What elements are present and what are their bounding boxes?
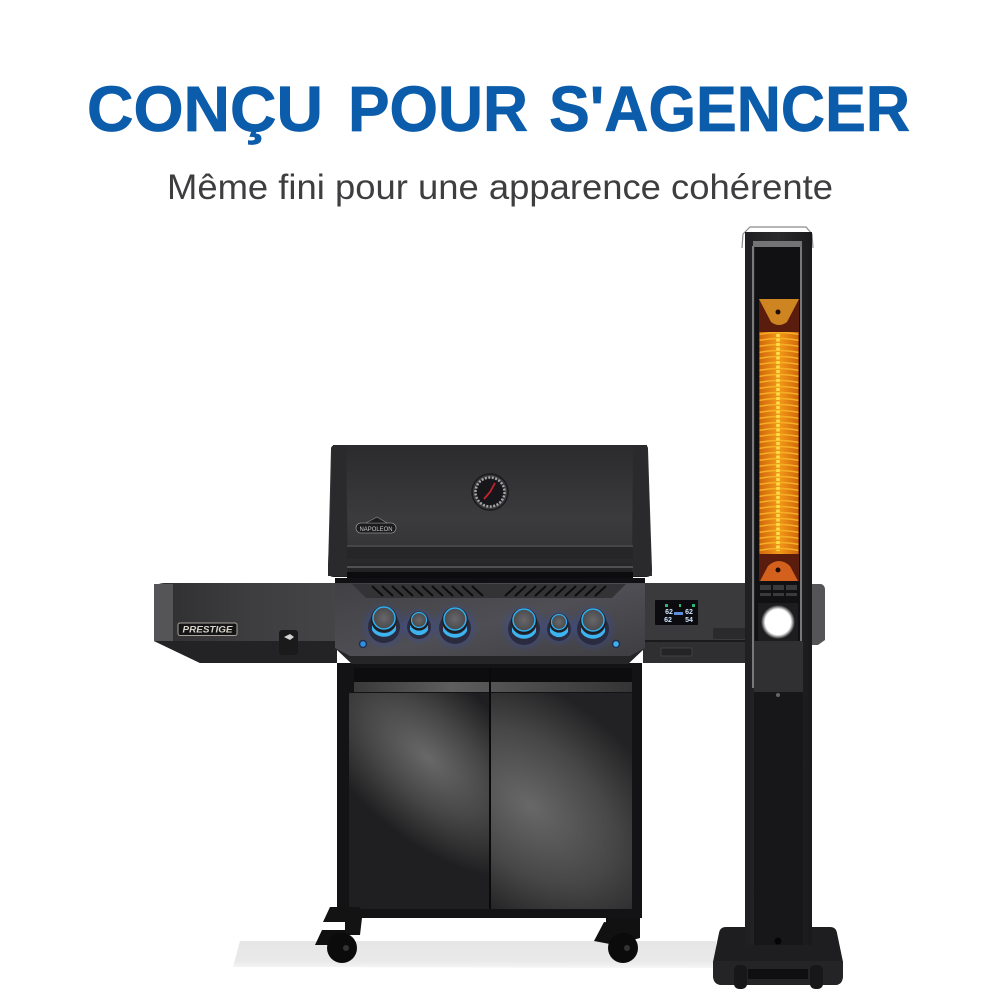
control panel xyxy=(335,583,645,664)
digital display: 54 xyxy=(685,617,693,624)
glowing filament xyxy=(776,334,780,551)
top reflector xyxy=(759,299,799,325)
knob 2 xyxy=(400,607,438,645)
digital display xyxy=(655,600,698,625)
title: CONÇU xyxy=(87,73,323,145)
digital display: 62 xyxy=(685,609,693,616)
vent louvers xyxy=(760,585,797,596)
side controls xyxy=(713,628,746,639)
prestige badge xyxy=(178,623,237,636)
knob 6 xyxy=(569,604,617,652)
knob 1 xyxy=(360,602,408,650)
heating element xyxy=(759,299,799,581)
grill xyxy=(154,445,746,963)
left caster xyxy=(315,907,362,963)
left door xyxy=(349,693,489,909)
napoleon logo xyxy=(356,517,396,533)
knob 4 xyxy=(500,604,548,652)
thermometer xyxy=(472,474,508,510)
right caster xyxy=(594,918,640,963)
title: S'AGENCER xyxy=(549,73,910,145)
floor shadow xyxy=(233,941,716,968)
napoleon logo: NAPOLEON xyxy=(360,526,393,533)
base xyxy=(713,927,843,989)
door handle strip xyxy=(354,682,632,692)
title: POUR xyxy=(348,73,528,145)
knob 3 xyxy=(431,603,479,651)
shelf end behind tower xyxy=(810,584,825,645)
top handle xyxy=(742,227,813,248)
tower body xyxy=(745,232,812,945)
digital display: 62 xyxy=(665,609,673,616)
right door xyxy=(491,693,632,909)
inner channel xyxy=(755,246,800,641)
prestige badge: PRESTIGE xyxy=(182,624,234,634)
shelf button xyxy=(279,630,298,655)
base wheels xyxy=(734,965,747,989)
subtitle: Même fini pour une apparence cohérente xyxy=(167,168,833,207)
patio heater tower xyxy=(713,227,843,989)
vent slots xyxy=(352,584,626,598)
right indicator light xyxy=(612,640,620,648)
front switches xyxy=(661,648,692,656)
digital display: 62 xyxy=(664,617,672,624)
bottom reflector xyxy=(760,561,798,581)
left indicator light xyxy=(360,640,366,648)
top cap xyxy=(753,241,802,247)
lower column xyxy=(754,641,803,692)
right side shelf xyxy=(643,583,746,663)
title xyxy=(87,73,910,145)
cart xyxy=(337,663,642,918)
side rails xyxy=(753,246,801,688)
lid xyxy=(328,445,652,583)
lamp xyxy=(758,603,798,641)
knob 5 xyxy=(540,609,578,647)
left side shelf xyxy=(154,583,337,663)
